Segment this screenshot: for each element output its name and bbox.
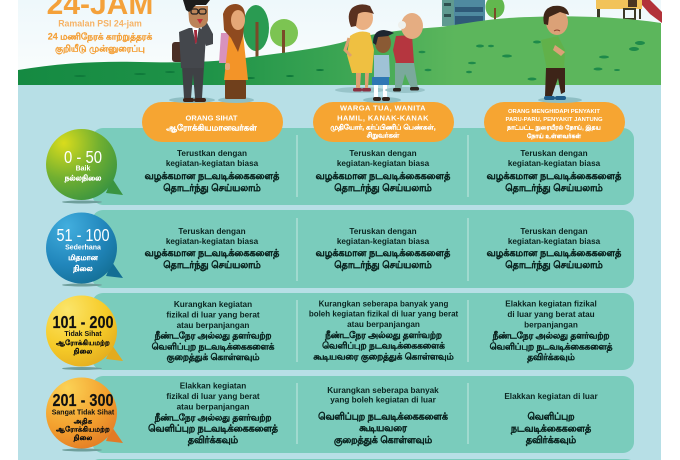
row 4: 201-300: தவிர்க்கவும் [187, 434, 238, 446]
badge: 51-100: 51 - 100 [56, 225, 110, 245]
playground with slide [596, 0, 662, 23]
row 1: 0-50: Teruskan dengan [349, 149, 417, 158]
row 3: 101-200: வெளிப்புற நடவடிக்கைகளைக் [322, 340, 445, 352]
title: குறியீடு முன்னுரைப்பு [55, 44, 145, 56]
badge: 51-100: மிதமான [68, 253, 98, 263]
row 1: 0-50: தொடர்ந்து செய்யலாம் [163, 182, 261, 194]
row 3: 101-200: boleh kegiatan fizikal di luar yang berat [309, 310, 459, 318]
badge: 101-200: நிலை [73, 346, 92, 356]
pill: orang menghidapi penyakit: நோய் உள்ளவர்கள் [527, 133, 581, 140]
sky background [18, 0, 661, 85]
row 3: 101-200: வெளிப்புற நடவடிக்கைகளைக் [152, 342, 275, 352]
row 4: 201-300: வெளிப்புற [528, 410, 574, 422]
row 4: 201-300: தவிர்க்கவும் [525, 434, 576, 446]
row 2: 51-100: வழக்கமான நடவடிக்கைகளைத் [316, 248, 451, 259]
badge: 0-50 [46, 129, 123, 204]
row 4: 201-300: கூடியவரை [359, 422, 407, 434]
figure: businessman [169, 0, 215, 103]
title [47, 0, 153, 56]
row 3: 101-200: Elakkan kegiatan fizikal [505, 300, 597, 308]
row 4: 201-300: நடவடிக்கைகளைத் [510, 422, 591, 434]
row 4: 201-300: atau berpanjangan [177, 402, 249, 412]
row 1: 0-50 [92, 128, 634, 205]
blue panel [18, 85, 661, 460]
badge: 101-200 [46, 296, 123, 370]
row 4: 201-300: குறைத்துக் கொள்ளவும் [334, 434, 432, 447]
row 2: 51-100: kegiatan-kegiatan biasa [166, 237, 259, 246]
figure: elderly man [385, 13, 425, 93]
row 3: 101-200: நீண்டநேர அல்லது தளர்வற்ற [324, 330, 442, 341]
row 4: 201-300: வெளிப்புற நடவடிக்கைகளைத் [148, 422, 278, 434]
row 1: 0-50: Terustkan dengan [177, 149, 247, 158]
row 4: 201-300: Elakkan kegiatan [180, 382, 246, 390]
badge: 201-300: Sangat Tidak Sihat [52, 410, 115, 416]
badge: 201-300: அதிக [74, 416, 93, 426]
figure: boy [363, 30, 401, 103]
row 3: 101-200: நீண்டநேர அல்லது தளர்வற்ற [154, 330, 271, 342]
row 3: 101-200: கூடியவரை குறைத்துக் கொள்ளவும் [313, 352, 454, 364]
row 3: 101-200: di luar yang berat atau [507, 310, 595, 319]
row 2: 51-100: தொடர்ந்து செய்யலாம் [334, 259, 432, 271]
pill: orang menghidapi penyakit: நாட்பட்ட நுரையீரல் நோய், இதய [506, 124, 601, 132]
row 1: 0-50: தொடர்ந்து செய்யலாம் [334, 182, 432, 194]
pill: warga tua: HAMIL, KANAK-KANAK [337, 114, 429, 122]
background trees [243, 0, 504, 61]
badge: 0-50: 0 - 50 [64, 147, 102, 167]
row 1: 0-50: தொடர்ந்து செய்யலாம் [505, 182, 603, 194]
row 2: 51-100: kegiatan-kegiatan biasa [508, 237, 601, 246]
badge: 201-300 [46, 378, 123, 452]
hills [18, 16, 661, 85]
row 1: 0-50: வழக்கமான நடவடிக்கைகளைத் [316, 171, 451, 182]
row 3: 101-200: நீண்டநேர அல்லது தளர்வற்ற [492, 330, 609, 342]
row 3: 101-200: குறைத்துக் கொள்ளவும் [167, 352, 259, 364]
row 1: 0-50: Teruskan dengan [520, 149, 588, 158]
row 4: 201-300: yang boleh kegiatan di luar [330, 396, 437, 404]
badge: 201-300: 201 - 300 [52, 390, 114, 410]
row 4: 201-300 [92, 376, 634, 453]
title: Ramalan PSI 24-jam [58, 18, 142, 28]
row 2: 51-100: தொடர்ந்து செய்யலாம் [505, 259, 603, 271]
row 2: 51-100: Teruskan dengan [349, 227, 417, 236]
badge: 101-200: 101 - 200 [52, 312, 114, 332]
figure: woman in hijab [218, 4, 254, 103]
pill: warga tua [313, 102, 454, 142]
row 1: 0-50: kegiatan-kegiatan biasa [337, 159, 430, 168]
figure: pregnant woman [335, 4, 385, 93]
row 3: 101-200 [92, 293, 634, 370]
row 3: 101-200: வெளிப்புற நடவடிக்கைகளைத் [490, 342, 613, 352]
pill: orang sihat: ORANG SIHAT [186, 114, 238, 122]
row 5 partial [92, 459, 634, 460]
badge: 51-100: நிலை [72, 264, 94, 274]
row 1: 0-50: வழக்கமான நடவடிக்கைகளைத் [145, 171, 280, 182]
row 2: 51-100: வழக்கமான நடவடிக்கைகளைத் [145, 248, 280, 259]
row 3: 101-200: atau berpanjangan [347, 320, 420, 329]
pill: warga tua: WARGA TUA, WANITA [340, 104, 426, 112]
row 3: 101-200: தவிர்க்கவும் [527, 352, 575, 363]
row 3: 101-200: Kurangkan kegiatan [174, 300, 252, 309]
row 2: 51-100: தொடர்ந்து செய்யலாம் [163, 259, 261, 271]
badge: 201-300: ஆரோக்கியமற்ற [56, 424, 110, 434]
badge: 51-100 [46, 212, 123, 286]
row 4: 201-300: fizikal di luar yang berat [166, 392, 260, 401]
title: 24 மணிநேரக் காற்றுத்தரக் [48, 32, 152, 42]
badge: 101-200: Tidak Sihat [64, 331, 102, 338]
pill: orang sihat [142, 102, 283, 142]
badge: 0-50: Baik [76, 166, 90, 172]
row 1: 0-50: kegiatan-kegiatan biasa [508, 159, 601, 168]
row 4: 201-300: Kurangkan seberapa banyak [327, 386, 439, 395]
badge: 201-300: நிலை [73, 433, 92, 443]
row 2: 51-100: Teruskan dengan [178, 227, 246, 236]
row 2: 51-100: Teruskan dengan [520, 227, 588, 236]
pill: orang menghidapi penyakit [484, 102, 625, 142]
row 3: 101-200: fizikal di luar yang berat [166, 310, 260, 320]
badge: 51-100: Sederhana [65, 244, 101, 252]
pill: warga tua: முதியோர், கர்ப்பிணிப் பெண்கள், [330, 124, 436, 132]
badge: 0-50: நல்லநிலை [64, 174, 102, 184]
pill: orang menghidapi penyakit: ORANG MENGHIDAPI PENYAKIT [508, 109, 600, 115]
row 4: 201-300: Elakkan kegiatan di luar [504, 392, 598, 401]
row 1: 0-50: kegiatan-kegiatan biasa [166, 159, 259, 168]
pill: warga tua: சிறுவர்கள் [367, 132, 400, 140]
building [442, 0, 485, 26]
badge: 101-200: ஆரோக்கியமற்ற [56, 338, 110, 347]
pill: orang menghidapi penyakit: PARU-PARU, PENYAKIT JANTUNG [505, 117, 603, 123]
row 2: 51-100 [92, 210, 634, 288]
row 3: 101-200: berpanjangan [524, 320, 578, 330]
row 1: 0-50: வழக்கமான நடவடிக்கைகளைத் [487, 171, 622, 182]
row 4: 201-300: நீண்டநேர அல்லது தளர்வற்ற [154, 412, 271, 424]
pill: orang sihat: ஆரோக்கியமானவர்கள் [166, 122, 258, 134]
row 3: 101-200: Kurangkan seberapa banyak yang [319, 300, 449, 308]
row 2: 51-100: வழக்கமான நடவடிக்கைகளைத் [487, 248, 622, 259]
figure: sick man [538, 6, 582, 103]
row 4: 201-300: வெளிப்புற நடவடிக்கைகளைக் [318, 410, 448, 422]
row 3: 101-200: atau berpanjangan [177, 321, 249, 330]
row 2: 51-100: kegiatan-kegiatan biasa [337, 237, 430, 246]
